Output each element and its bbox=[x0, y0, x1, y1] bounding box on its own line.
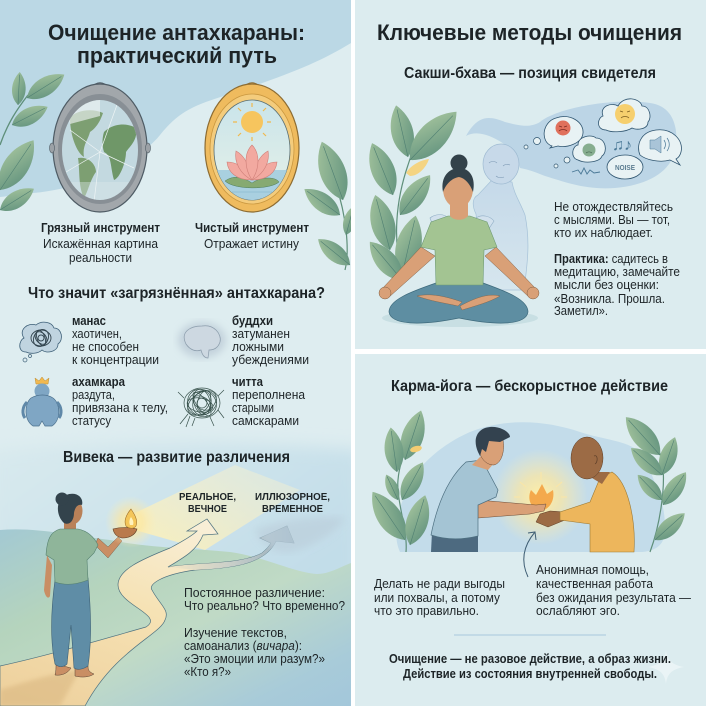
text: chitta: читта bbox=[232, 375, 264, 389]
label: illusory temporary: ИЛЛЮЗОРНОЕ, bbox=[255, 491, 330, 503]
icon: chaotic cloud bbox=[20, 322, 61, 362]
figure: witness ghost bbox=[430, 144, 528, 290]
hills bbox=[0, 529, 351, 706]
figure: person holding lamp bbox=[44, 492, 122, 677]
scene: viveka landscape bbox=[0, 442, 361, 706]
sky bbox=[0, 443, 351, 574]
panel: left column bbox=[0, 0, 361, 706]
text: not for gain bbox=[374, 577, 505, 618]
bubble: noise: NOISE bbox=[615, 163, 635, 172]
title bbox=[48, 24, 303, 68]
label: clean instrument: Чистый инструмент bbox=[195, 221, 309, 235]
text: self inquiry: самоанализ (вичара): bbox=[184, 639, 302, 653]
icon: foggy brain bbox=[178, 322, 226, 358]
text: manas: манас bbox=[72, 314, 106, 328]
text: buddhi bbox=[232, 314, 309, 367]
heading: karma yoga: Карма-йога — бескорыстное действие bbox=[391, 378, 668, 395]
text: self inquiry bbox=[184, 628, 324, 676]
icon: thought cloud bbox=[466, 102, 676, 188]
text: buddhi: ложными bbox=[232, 340, 284, 354]
label: real eternal bbox=[180, 493, 236, 512]
text: buddhi: затуманен bbox=[232, 327, 290, 341]
bubble: angry face bbox=[544, 117, 583, 148]
figure: receiving man bbox=[536, 437, 634, 552]
text: practice: «Возникла. Прошла. bbox=[554, 292, 665, 306]
panel: witness method bbox=[355, 0, 706, 349]
text: constant discrimination bbox=[184, 586, 345, 613]
icon: leaves left bbox=[0, 72, 64, 211]
illusory arrow bbox=[168, 526, 294, 570]
heading: viveka: Вивека — развитие различения bbox=[63, 449, 290, 466]
icon: left plant bbox=[363, 407, 435, 552]
text: practice: медитацию, замечайте bbox=[554, 265, 680, 279]
text: not for gain: что это правильно. bbox=[374, 604, 479, 618]
text: do not identify: кто их наблюдает. bbox=[554, 226, 653, 240]
text: ahamkara: раздута, bbox=[72, 388, 115, 402]
figure: meditating person bbox=[379, 154, 539, 327]
fog bbox=[260, 520, 337, 552]
title: Ключевые методы очищения bbox=[377, 20, 682, 45]
label: real eternal: РЕАЛЬНОЕ, bbox=[179, 491, 236, 503]
text: buddhi: буддхи bbox=[232, 314, 273, 328]
text: anonymous help: ослабляют эго. bbox=[536, 604, 620, 618]
icon: leaves right bbox=[304, 142, 351, 270]
panel: karma yoga bbox=[355, 354, 706, 706]
bubble: noise bbox=[607, 155, 643, 179]
label: clean instrument bbox=[195, 221, 309, 251]
text: self inquiry: Изучение текстов, bbox=[184, 626, 287, 640]
icon: dirty mirror with globe bbox=[50, 83, 150, 212]
text: self inquiry: «Это эмоции или разум?» bbox=[184, 652, 325, 666]
label: dirty instrument: Искажённая картина bbox=[43, 237, 158, 251]
icon: thought dots and noise wave bbox=[524, 138, 600, 174]
icon: right plant bbox=[618, 410, 693, 552]
text: constant discrimination: Что реально? Что временно? bbox=[184, 599, 345, 613]
icon: glow and flame bbox=[492, 449, 588, 545]
icon: inflated ego figure bbox=[23, 377, 61, 426]
text: constant discrimination: Постоянное различение: bbox=[184, 586, 325, 600]
text: manas bbox=[72, 314, 159, 367]
text: chitta bbox=[232, 375, 305, 428]
bubble: neutral face bbox=[573, 136, 605, 162]
text: practice: Практика: садитесь в bbox=[554, 252, 668, 266]
text: chitta: самскарами bbox=[232, 414, 299, 428]
arrow: to the hands bbox=[524, 532, 536, 577]
heading: dirty antahkarana: Что значит «загрязнённая» антахкарана? bbox=[28, 285, 325, 302]
text: not for gain: или похвалы, а потому bbox=[374, 591, 501, 605]
closing statement: Действие из состояния внутренней свободы. bbox=[403, 666, 657, 681]
icon: tangled threads bbox=[178, 384, 224, 427]
bubble: speaker bbox=[639, 130, 681, 165]
text: anonymous help: без ожидания результата — bbox=[536, 591, 691, 605]
label: dirty instrument: реальности bbox=[69, 251, 132, 265]
text: chitta: переполнена bbox=[232, 388, 305, 402]
text: buddhi: убеждениями bbox=[232, 353, 309, 367]
bubble: sad face bbox=[598, 99, 650, 132]
title: Очищение антахкараны: bbox=[48, 20, 305, 45]
icon: sparkle bbox=[648, 650, 684, 684]
text: practice: Заметил». bbox=[554, 304, 608, 318]
background blob bbox=[396, 422, 665, 552]
label: illusory temporary bbox=[256, 493, 330, 512]
text: anonymous help: Анонимная помощь, bbox=[536, 563, 649, 577]
icon: plant bbox=[361, 102, 466, 287]
text: anonymous help bbox=[536, 563, 691, 618]
light beam bbox=[135, 465, 300, 550]
text: self inquiry: «Кто я?» bbox=[184, 665, 231, 679]
text: practice: мысли без оценки: bbox=[554, 278, 659, 292]
closing statement bbox=[389, 651, 671, 681]
label: real eternal: ВЕЧНОЕ bbox=[188, 503, 227, 515]
text: ahamkara: привязана к телу, bbox=[72, 401, 168, 415]
closing statement: Очищение — не разовое действие, а образ жизни. bbox=[389, 651, 671, 666]
title: практический путь bbox=[77, 43, 277, 68]
icon: lamp with flame bbox=[108, 499, 150, 546]
text: anonymous help: качественная работа bbox=[536, 577, 653, 591]
label: illusory temporary: ВРЕМЕННОЕ bbox=[262, 503, 323, 515]
label: dirty instrument bbox=[41, 221, 160, 265]
text: manas: к концентрации bbox=[72, 353, 159, 367]
text: manas: не способен bbox=[72, 340, 139, 354]
label: clean instrument: Отражает истину bbox=[204, 237, 300, 251]
label: dirty instrument: Грязный инструмент bbox=[41, 221, 160, 235]
figure: giving man bbox=[431, 427, 546, 552]
text: do not identify: с мыслями. Вы — тот, bbox=[554, 213, 670, 227]
text: ahamkara: статусу bbox=[72, 414, 112, 428]
icon: clean mirror with lotus bbox=[205, 83, 299, 212]
text: ahamkara bbox=[72, 375, 168, 428]
text: practice bbox=[554, 252, 680, 318]
background wave bbox=[0, 0, 351, 197]
text: ahamkara: ахамкара bbox=[72, 375, 126, 389]
road bbox=[0, 519, 294, 706]
text: not for gain: Делать не ради выгоды bbox=[374, 577, 505, 591]
text: manas: хаотичен, bbox=[72, 327, 122, 341]
heading: sakshi bhava: Сакши-бхава — позиция свидетеля bbox=[404, 65, 656, 82]
text: chitta: старыми bbox=[232, 401, 274, 415]
shadow bbox=[0, 670, 80, 706]
icon: music notes: ♫♪ bbox=[612, 137, 632, 154]
text: do not identify: Не отождествляйтесь bbox=[554, 200, 673, 214]
text: do not identify bbox=[554, 200, 673, 240]
